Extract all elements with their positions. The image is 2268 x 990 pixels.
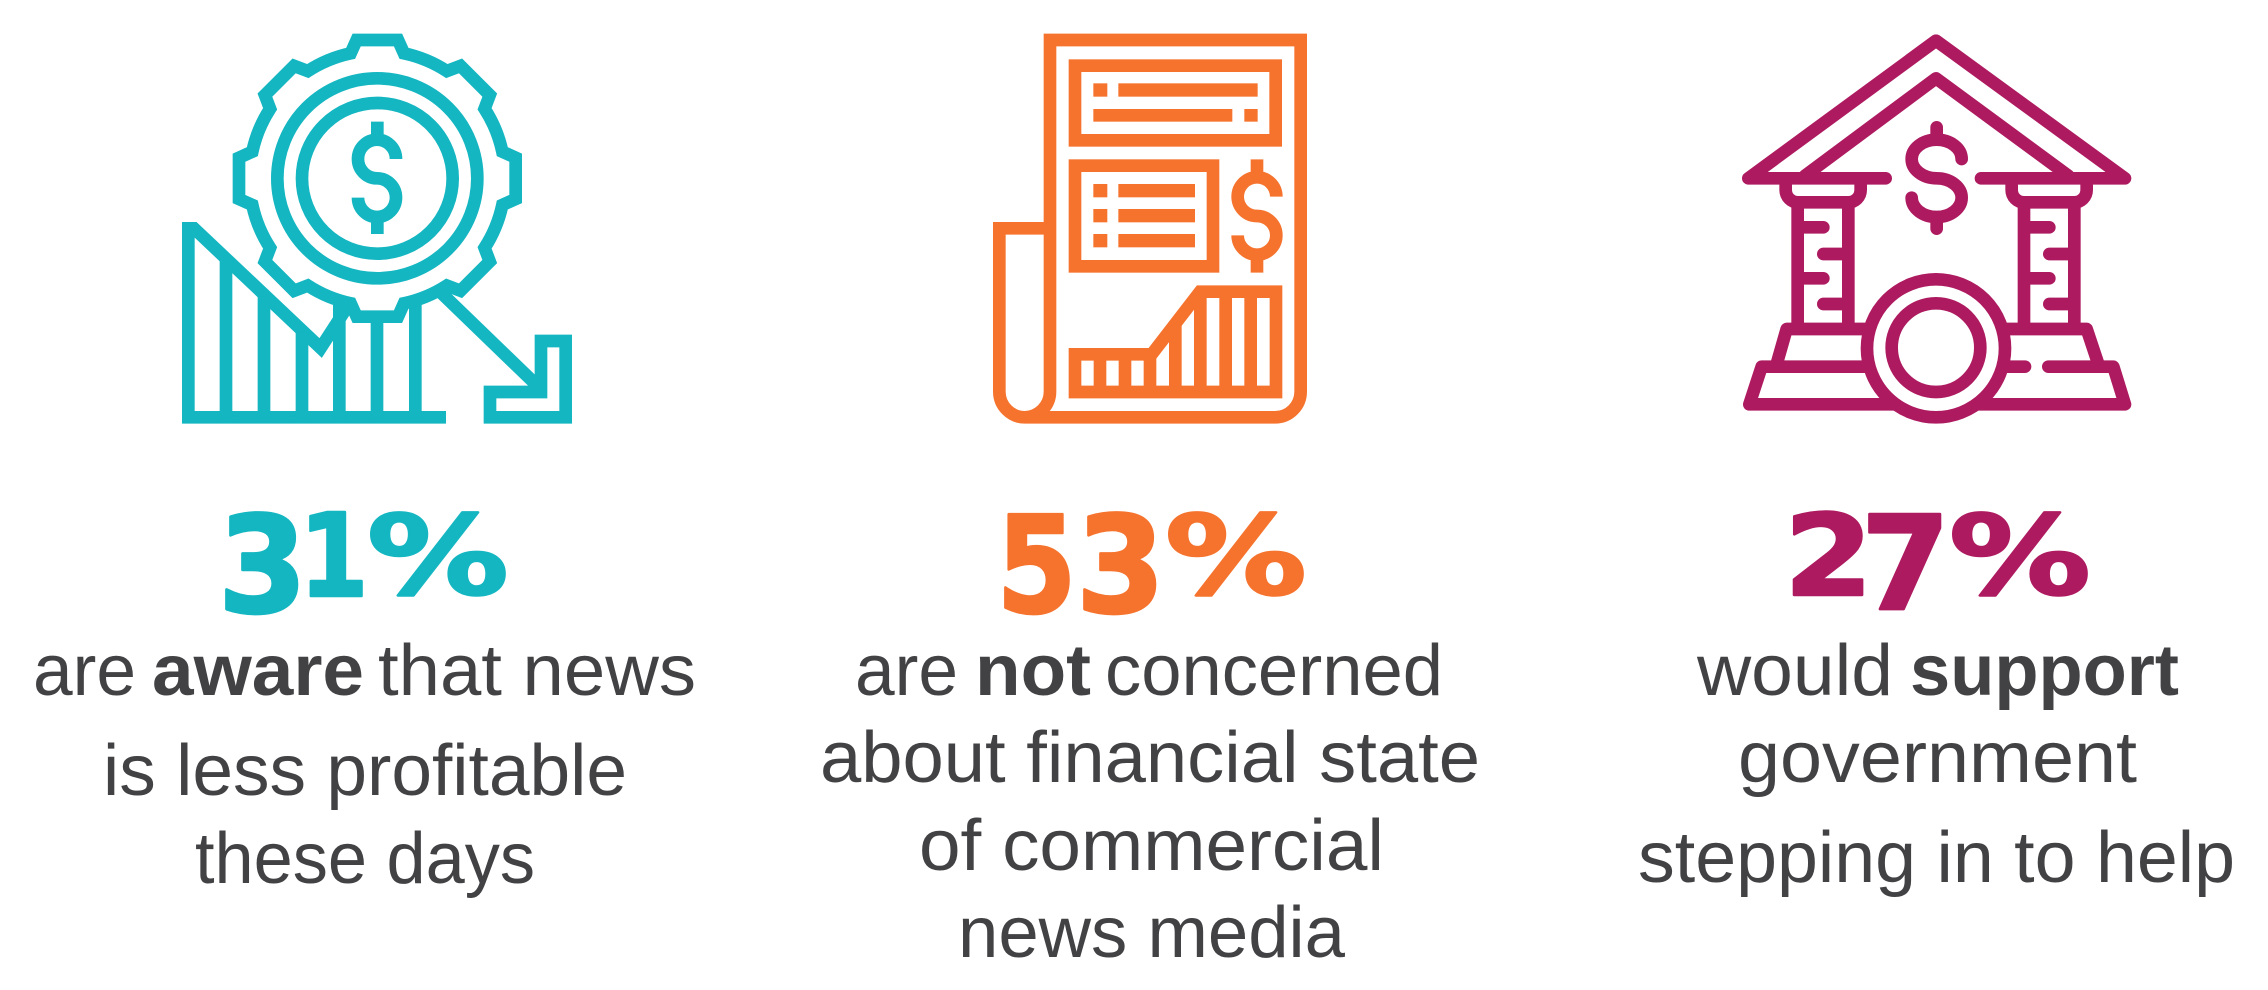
text: would support government stepping in to help: support	[1910, 631, 2179, 711]
stat: 31%: %	[367, 492, 509, 620]
stat: 31%: 3	[218, 487, 307, 644]
stat: 27%	[1784, 489, 2091, 640]
icon part: base steps	[1749, 329, 2125, 404]
icon: bank building with dollar and coin	[1748, 41, 2125, 417]
text: are not concerned about financial state of commercial news media: concerned	[1105, 631, 1443, 711]
stat: 53%: %	[1165, 492, 1307, 620]
icon part: dollar sign	[1238, 159, 1276, 273]
stat: 27%: %	[1949, 492, 2091, 620]
stat: 53%: 5	[996, 489, 1077, 644]
icon part: coin rings	[277, 78, 477, 278]
icon part: rising bar chart	[1075, 292, 1276, 392]
icon: gear with dollar and falling chart	[188, 40, 566, 417]
stat: 53%: 3	[1076, 487, 1165, 644]
icon part: dollar sign	[358, 122, 396, 234]
icon part: coin	[1867, 279, 2005, 417]
text: are not concerned about financial state of commercial news media: are	[855, 631, 958, 711]
stat: 31%: 1	[299, 490, 369, 624]
text: are not concerned about financial state of commercial news media	[820, 631, 1480, 973]
text: are aware that news is less profitable these days: is less profitable	[103, 731, 627, 811]
icon part: falling bar chart	[188, 228, 446, 417]
text: would support government stepping in to help: stepping in to help	[1638, 818, 2235, 898]
stat: 53%	[996, 487, 1307, 644]
text: would support government stepping in to help: government	[1738, 718, 2137, 798]
icon part: gear	[239, 40, 516, 317]
icon part: left column	[1786, 185, 1861, 328]
icon part: list box	[1075, 166, 1213, 266]
text: are aware that news is less profitable these days: these days	[195, 819, 535, 899]
icon part: roof	[1748, 41, 2125, 178]
panel: not concerned about financial state	[820, 40, 1480, 973]
stat: 27%: 2	[1784, 492, 1873, 622]
icon part: down arrow	[442, 293, 566, 417]
text: would support government stepping in to help: would	[1696, 631, 1893, 711]
text: are not concerned about financial state of commercial news media: of commercial	[919, 806, 1384, 886]
text: are aware that news is less profitable these days: that news	[378, 631, 696, 711]
icon part: right column	[2012, 185, 2087, 328]
stat: 27%: 7	[1861, 489, 1950, 640]
icon part: dollar sign	[1912, 127, 1962, 229]
icon part: paper outline	[999, 40, 1301, 417]
text: are not concerned about financial state of commercial news media: not	[975, 631, 1091, 711]
text: are aware that news is less profitable these days: aware	[152, 631, 364, 711]
icon: newspaper with dollar and chart	[999, 40, 1301, 417]
text: would support government stepping in to help	[1638, 631, 2235, 898]
text: are not concerned about financial state of commercial news media: news media	[958, 893, 1346, 973]
text: are aware that news is less profitable these days: are	[33, 631, 136, 711]
text: are not concerned about financial state of commercial news media: about financial state	[820, 718, 1480, 798]
panel: aware that news is less profitable	[33, 40, 696, 899]
text: are aware that news is less profitable these days	[33, 631, 696, 899]
stat: 31%	[218, 487, 509, 644]
panel: would support government stepping in	[1638, 41, 2235, 898]
icon part: top article box	[1075, 66, 1276, 140]
